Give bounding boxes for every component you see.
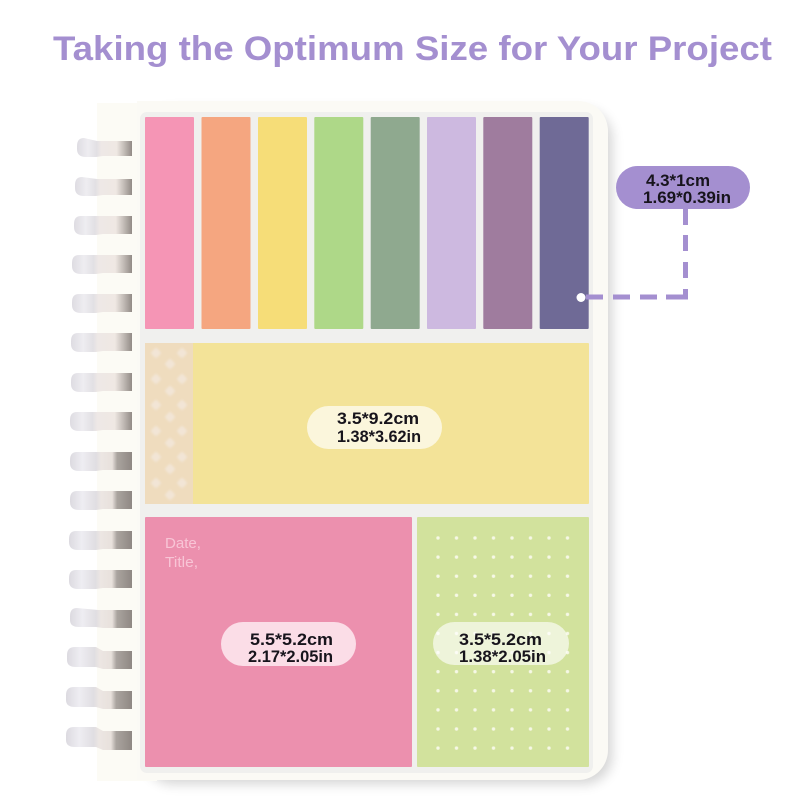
patterned tab — [145, 343, 193, 504]
strip markers — [145, 117, 589, 329]
callout: marker size — [576, 166, 750, 302]
size label: yellow note — [307, 406, 442, 449]
marker: orange — [202, 117, 250, 329]
size label: green note: 1.38*2.05in — [459, 647, 546, 666]
ring 5 — [72, 294, 132, 313]
ring 12 — [69, 570, 132, 589]
dot grid — [429, 528, 577, 758]
leader dot — [576, 293, 586, 302]
cover — [137, 101, 608, 780]
marker: sage — [371, 117, 420, 329]
ring 11 — [69, 531, 132, 550]
ring 4 — [72, 255, 132, 274]
size label: green note — [433, 622, 569, 666]
notebook — [66, 101, 612, 784]
ring 15 — [66, 687, 132, 709]
cover shadow — [145, 110, 612, 784]
panel: green dotted note — [417, 517, 589, 767]
callout text: 4.3*1cm — [646, 171, 710, 190]
tab diamonds — [150, 347, 188, 501]
ring 13 — [70, 608, 132, 628]
marker: mauve — [483, 117, 532, 329]
spiral binding — [66, 138, 132, 750]
callout text: 1.69*0.39in — [643, 188, 731, 207]
marker: green — [314, 117, 363, 329]
ring 10 — [70, 491, 132, 510]
ring 8 — [70, 412, 132, 431]
pre-printed fields: Title, — [165, 554, 198, 571]
size label: yellow note: 1.38*3.62in — [337, 427, 421, 446]
marker: lilac — [427, 117, 476, 329]
marker: indigo — [540, 117, 589, 329]
size label: pink note: 2.17*2.05in — [248, 647, 333, 666]
ring 14 — [67, 647, 132, 669]
size label: yellow note: 3.5*9.2cm — [337, 409, 419, 428]
callout pill — [616, 166, 750, 209]
size label: pink note: 5.5*5.2cm — [250, 630, 333, 649]
panel: yellow note — [145, 343, 589, 504]
cover back strip — [97, 103, 157, 781]
ring 2 — [75, 177, 132, 196]
ring 7 — [71, 373, 132, 392]
callout text — [643, 171, 731, 207]
dashed leader line — [586, 209, 688, 297]
marker: yellow — [258, 117, 307, 329]
panel: pink note — [145, 517, 412, 767]
ring 16 — [66, 727, 132, 750]
inner page — [140, 112, 593, 773]
ring 3 — [74, 216, 132, 235]
pre-printed fields — [165, 535, 201, 571]
size label: pink note — [221, 622, 356, 666]
ring 1 — [77, 138, 132, 157]
pre-printed fields: Date, — [165, 535, 201, 552]
ring 6 — [71, 333, 132, 352]
size label: green note: 3.5*5.2cm — [459, 630, 542, 649]
ring 9 — [70, 452, 132, 471]
title: Taking the Optimum Size for Your Project — [53, 30, 772, 68]
marker: pink — [145, 117, 194, 329]
